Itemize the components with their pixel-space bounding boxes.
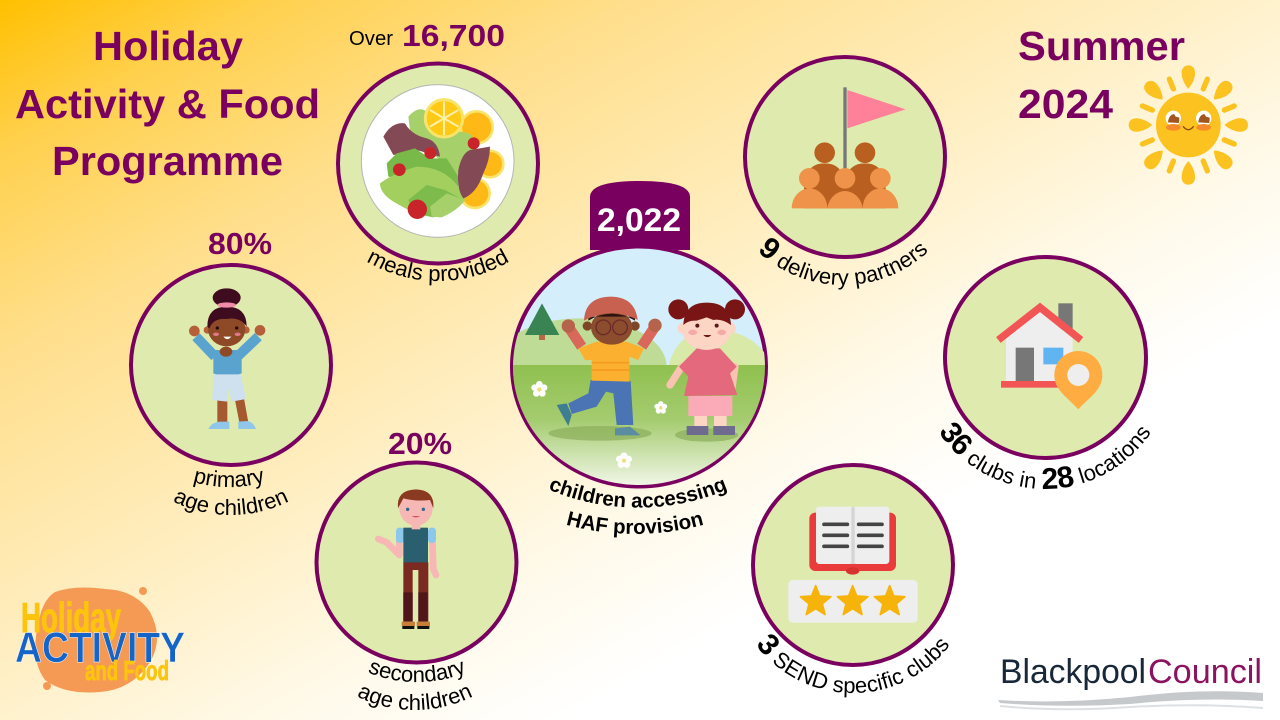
logo: Holiday Activity and Food: ACTIVITY xyxy=(15,624,185,672)
icon: secondary age boy xyxy=(378,489,436,629)
label: children accessing HAF provision: HAF provision xyxy=(567,511,703,538)
stat: Over 16,700: Over xyxy=(349,28,393,50)
logo: Holiday Activity and Food xyxy=(15,587,185,692)
label: secondary age children xyxy=(358,662,472,710)
panel: secondary age children xyxy=(314,426,518,710)
circle: primary xyxy=(131,265,331,465)
icon: primary age girl xyxy=(189,288,265,429)
circle: meals xyxy=(338,64,538,264)
logo: Blackpool Council xyxy=(998,653,1263,709)
panel: SEND clubs xyxy=(751,463,955,698)
logo: Blackpool Council: Blackpool xyxy=(1000,653,1146,691)
panel: delivery partners xyxy=(743,55,947,290)
label: primary age children xyxy=(174,470,288,515)
title: Holiday Activity & Food Programme: Activity & Food xyxy=(15,81,320,127)
label: 3 SEND specific clubs: 3 SEND specific clubs xyxy=(758,634,948,698)
circle: SEND xyxy=(753,465,953,665)
icon: salad plate xyxy=(361,85,514,237)
illustration: two children playing xyxy=(512,296,765,485)
circle: partners xyxy=(745,57,945,257)
stat: Over 16,700 xyxy=(349,18,505,53)
stat: 20%: 20% xyxy=(388,426,452,461)
icon: open book and three stars xyxy=(788,507,918,623)
label: secondary age children: secondary xyxy=(368,662,463,682)
title: Holiday Activity & Food Programme xyxy=(15,23,320,184)
logo: Holiday Activity and Food: and Food xyxy=(85,655,169,686)
icon: smiling sun xyxy=(1128,65,1248,185)
panel: clubs and locations xyxy=(941,255,1150,490)
panel: primary age children xyxy=(129,226,333,515)
label: 36 clubs in 28 locations: 36 clubs in 28 locations xyxy=(941,422,1150,490)
circle: clubs xyxy=(945,257,1146,458)
panel: meals provided xyxy=(336,18,540,286)
title: Holiday Activity & Food Programme: Programme xyxy=(52,138,283,184)
logo: Blackpool Council: Council xyxy=(1148,653,1262,691)
heading: Summer 2024 xyxy=(1018,23,1185,127)
boy xyxy=(557,297,662,435)
label: secondary age children: age children xyxy=(358,687,472,710)
icon: team with flag xyxy=(792,87,906,208)
label: children accessing HAF provision xyxy=(550,480,727,538)
heading: Summer 2024: Summer xyxy=(1018,23,1185,69)
logo: Holiday Activity and Food: Holiday xyxy=(21,594,121,641)
circle: central scene xyxy=(493,246,773,488)
girl xyxy=(668,299,745,435)
label: primary age children: age children xyxy=(174,492,288,515)
icon: house with location pin xyxy=(998,303,1102,409)
title: Holiday Activity & Food Programme: Holiday xyxy=(93,23,243,69)
stat tab: 2,022: 2,022 xyxy=(597,202,681,238)
stat: 80%: 80% xyxy=(208,226,272,261)
label: meals provided: meals provided xyxy=(367,248,509,286)
stat tab: 2,022 xyxy=(590,181,690,250)
label: primary age children: primary xyxy=(193,470,262,489)
heading: Summer 2024: 2024 xyxy=(1018,81,1113,127)
panel: children accessing HAF provision xyxy=(510,181,768,538)
circle: secondary xyxy=(316,462,516,662)
label: children accessing HAF provision: children accessing xyxy=(550,480,727,508)
label: 9 delivery partners: 9 delivery partners xyxy=(760,238,927,290)
stat: Over 16,700: 16,700 xyxy=(402,18,505,53)
